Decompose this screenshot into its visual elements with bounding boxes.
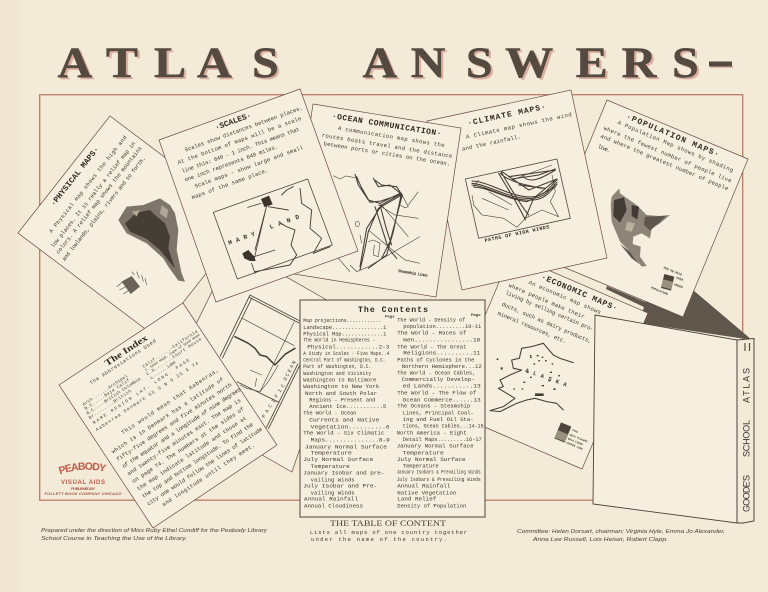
map: South America: [118, 198, 185, 282]
map caption: Steamship Lines: [398, 269, 429, 279]
heading and text: The Index: Aabenraa Denmark 55 5 N 9 25 E 74: [95, 361, 200, 433]
heading and text: The Index: The Abbreviations Used: [89, 338, 157, 386]
footer: prepared by note: [41, 528, 267, 542]
contents right column: Temperature: [403, 449, 444, 456]
map: Pacific coastline: PACIFIC: [261, 381, 288, 419]
contents right column: January Normal Surface: [397, 443, 474, 450]
contents left column: Temperature: [311, 450, 352, 457]
heading and text: Ocean Communication: A communication map shows the: [337, 125, 445, 149]
contents right column: The World - Ocean Cables,: [397, 369, 475, 376]
heading and text: Ocean Communication: [320, 111, 456, 168]
title: ANSWERS: [365, 41, 701, 89]
footer: committee: Committee: Helen Dorsart, chairman; Virginia Hyle, Emma Jo Alexander,: [517, 529, 725, 535]
map: Maryland: [213, 179, 332, 279]
legend: economic products: COAL: [572, 429, 579, 434]
heading and text: Scales: line this: 640 - 1 inch. This means that: [181, 126, 301, 175]
logo: Peabody Visual Aids: PUBLISHED BY: [71, 486, 95, 491]
contents right column: The World - The Flow of: [397, 390, 476, 397]
heading and text: Economic Maps: mineral resources, etc.: [497, 310, 567, 345]
contents left column: Central Part of Washington, D.C.: [303, 356, 385, 363]
heading and text: Population Maps: [595, 106, 740, 202]
footer: the table of content note: under the name of the country.: [311, 537, 447, 543]
heading and text: Climate Maps: [456, 98, 575, 153]
heading and text: The Index: B.C.....British Columbia: [86, 377, 142, 416]
contents right column: Annual Rainfall: [397, 483, 451, 490]
contents right column: The World - The Great: [397, 343, 466, 350]
contents right column: population.........10-11: [403, 323, 482, 330]
contents left column: North and South Polar: [305, 390, 377, 397]
contents left column: Washington and Vicinity: [303, 370, 372, 377]
map: Pacific coastline: OCEAN: [282, 358, 298, 382]
legend: population: [650, 266, 684, 296]
heading and text: Ocean Communication: ·OCEAN COMMUNICATION·: [331, 112, 442, 139]
legend: population: PER SQ.MILE: [663, 266, 683, 277]
contents right column: ed Lands...........13: [403, 383, 481, 390]
heading and text: Scales: maps of the same place.: [191, 167, 269, 201]
contents left column: vailing Winds: [311, 489, 355, 496]
footer: committee: [517, 529, 725, 543]
heading and text: Scales: At the bottom of maps will be a scale: [177, 115, 302, 166]
map: Alaska: [490, 343, 573, 412]
contents left column: July Isobar and Pre-: [303, 483, 377, 490]
legend: population: POPULATION: [650, 286, 668, 296]
contents left column: Page: [385, 316, 395, 320]
contents right column: Commercially Develop-: [402, 376, 475, 383]
map: steamship lines: [333, 174, 420, 272]
heading and text: The Index: and twenty-five minutes east. The map is: [126, 397, 242, 477]
contents right column: Temperature: [403, 462, 439, 469]
contents right column: ing and Fuel Oil Sta-: [403, 416, 474, 423]
footer: prepared by note: School Course in Teaching the Use of the Library.: [41, 536, 187, 542]
legend: economic products: GOLD PLACERS: [569, 433, 588, 444]
contents left column: January Isobar and pre-: [303, 469, 384, 476]
map caption: PATHS OF HIGH WINDS: [484, 224, 550, 244]
contents right column: men................10: [403, 336, 481, 343]
map: Maryland: MARY: [227, 229, 260, 247]
heading and text: The Index: of the equator and a longitude of nine degrees: [121, 386, 242, 470]
legend: economic products: COPPER LODE: [566, 441, 583, 451]
heading and text: Scales: Scale maps - show large and small: [194, 144, 305, 190]
contents left column: Physical............2-3: [307, 344, 389, 351]
footer: the table of content note: [310, 519, 467, 543]
heading and text: Economic Maps: living by selling certain pro-: [504, 289, 595, 333]
spine title: Goode's: GOODE'S: [742, 475, 752, 512]
contents left column: July Normal Surface: [303, 456, 373, 463]
title: ATLAS: [57, 38, 279, 86]
heading and text: Physical Maps: low places. It is really a relief map in: [49, 140, 137, 249]
card: Population Maps: [542, 100, 748, 317]
heading and text: The Index: Calif.......California: [142, 329, 199, 370]
heading and text: Scales: [170, 94, 320, 201]
heading and text: The Index: C. Good Hope..Cape of Good Hope: [144, 333, 201, 373]
heading and text: Climate Maps: A Climate map shows the wind: [465, 111, 572, 141]
heading and text: The Index: on page 74. The numbers at the sides of: [131, 406, 246, 485]
heading and text: Physical Maps: and lowlands, plains, rivers and so forth.: [61, 155, 147, 262]
contents left column: The World - Six Climatic: [303, 429, 384, 436]
card: The Index: [59, 303, 277, 528]
heading and text: Population Maps: and where the greatest number of people: [599, 133, 729, 192]
footer: the table of content note: Lists all maps of one country together: [310, 530, 467, 536]
book: Goode's School Atlas: [593, 315, 754, 523]
heading and text: The Index: city one would follow the lines of latitude: [146, 426, 264, 507]
legend: economic products: GOLD LODES: [567, 437, 584, 446]
contents left column: Ancient Ice...........5: [309, 403, 386, 410]
heading and text: Economic Maps: where people make their: [507, 282, 586, 320]
footer: the table of content note: THE TABLE OF CONTENT: [330, 519, 446, 528]
contents left column: Part of Washington, D.C.: [303, 363, 371, 370]
contents left column: Washington to New York: [303, 383, 380, 390]
heading and text: The Index: and longitude until they meet.: [161, 442, 256, 508]
logo: Peabody Visual Aids: FOLLETT BOOK COMPANY CHICAGO: [44, 491, 122, 496]
legend: population: UNDER: [674, 283, 683, 289]
heading and text: The Index: Br........British: [88, 389, 133, 421]
contents right column: The Oceans - Steamship: [397, 403, 470, 410]
logo: Peabody Visual Aids: VISUAL AIDS: [61, 480, 105, 486]
contents left column: The World in Hemispheres -: [303, 337, 375, 344]
legend: elevation shading: [117, 272, 147, 294]
logo: Peabody Visual Aids: [44, 462, 122, 496]
heading and text: Climate Maps: and the rainfall.: [461, 133, 522, 153]
heading and text: Economic Maps: An economic map shows: [528, 279, 602, 316]
contents left column: The World - Ocean: [303, 410, 356, 417]
heading and text: Physical Maps: ·PHYSICAL MAPS·: [49, 146, 102, 208]
card: Physical Maps: [18, 116, 248, 337]
heading and text: The Index: B.C.....Baja Calif.: [84, 377, 133, 412]
contents left column: Landscape................1: [303, 324, 387, 331]
heading and text: The Index: fifty-five degrees and five minutes north: [115, 381, 233, 463]
heading and text: Ocean Communication: between ports or cities on the ocean.: [323, 140, 451, 168]
footer: committee: Anna Lee Russell, Lois Heiser, Robert Clapp.: [532, 537, 668, 543]
heading and text: Economic Maps: ·ECONOMIC MAPS·: [540, 273, 619, 313]
footer: prepared by note: Prepared under the direction of Miss Ruby Ethel Cundiff for the Peabody Library: [41, 528, 267, 534]
legend: economic products: [554, 422, 588, 451]
contents right column: [397, 314, 484, 509]
heading and text: The Index: [66, 305, 272, 516]
spine marks: [745, 343, 750, 351]
contents right column: Native Vegetation: [397, 489, 456, 496]
contents right column: Land Relief: [397, 496, 436, 503]
contents right column: North America - Eight: [397, 429, 467, 436]
card: Ocean Communication: [288, 104, 461, 297]
contents left column: Annual Cloudiness: [304, 503, 363, 510]
heading and text: Scales: one inch represents 640 miles.: [184, 143, 279, 183]
heading and text: The Index: the top and bottom longitude. To find the: [141, 421, 255, 500]
contents right column: Northern Hemisphere...12: [402, 363, 482, 370]
spine title: School: SCHOOL: [742, 420, 752, 457]
map: Alaska: ALASKA: [524, 367, 572, 390]
title: ATLAS: [60, 41, 281, 89]
contents right column: tions, Ocean Cables...14-15: [403, 423, 484, 430]
title: [57, 38, 733, 89]
contents left column: Temperature: [311, 463, 350, 470]
heading and text: Physical Maps: A Physical map shows the high and: [48, 134, 129, 234]
card: Economic Maps: [445, 254, 648, 469]
contents left column: Maps...............8-9: [311, 437, 390, 444]
map: North America population: [611, 188, 670, 267]
contents right column: Page: [471, 314, 481, 318]
contents left column: Physical Map.............1: [303, 330, 387, 337]
contents right column: Detail Maps.........16-17: [403, 436, 482, 443]
logo: Peabody Visual Aids: PEABODY: [58, 462, 106, 474]
contents left column: Annual Rainfall: [304, 496, 359, 503]
contents left column: [303, 316, 395, 510]
heading and text: Economic Maps: [496, 263, 619, 358]
contents right column: July Normal Surface: [397, 456, 466, 463]
contents left column: Vegetation..........6: [311, 423, 390, 430]
contents left column: Map projections............: [303, 317, 381, 324]
red frame: [40, 95, 743, 500]
map: Maryland: LAND: [269, 212, 305, 231]
icon: dark pages wedge of the atlas: [640, 290, 752, 340]
contents right column: Religions..........11: [403, 350, 481, 357]
heading and text: The Index: The Index: [103, 332, 150, 368]
heading and text: Scales: ·SCALES·: [214, 111, 253, 133]
heading and text: Physical Maps: [27, 124, 151, 262]
heading and text: The Index: This would mean that Aabenraa,: [120, 367, 220, 436]
title: ANSWERS: [363, 38, 699, 86]
contents right column: Density of Population: [397, 502, 466, 509]
contents right column: The World - Races of: [397, 330, 466, 337]
map: Pacific coastline: [220, 295, 300, 429]
spine title: Atlas: ATLAS: [742, 368, 752, 403]
panel: The Contents: [300, 300, 485, 517]
contents right column: Lines, Principal Coal-: [403, 410, 474, 417]
heading and text: The Index: NAME REGION LAT. LONG. PAGE: [92, 358, 191, 426]
heading and text: Scales: Scales show distances between places.: [184, 104, 304, 154]
heading and text: The Index: which is in Denmark has a latitude of: [110, 376, 225, 455]
heading and text: Population Maps: where the fewest number of people live: [603, 125, 733, 184]
heading and text: Economic Maps: ducts, such as dairy products,: [501, 301, 593, 345]
heading and text: Population Maps: ·POPULATION MAPS·: [625, 113, 720, 159]
heading and text: The Index: Arch.......Archipel: [82, 374, 129, 408]
heading and text: Population Maps: A Population Map shows by shading: [616, 119, 734, 174]
card: Climate Maps: [427, 90, 607, 290]
contents right column: January Isobars & Prevailing Winds: [397, 469, 481, 476]
contents left column: Regions - Present and: [309, 396, 375, 403]
icon: page edges sliver: [606, 286, 650, 309]
contents left column: Washington to Baltimore: [303, 376, 376, 383]
heading and text: Population Maps: live.: [597, 143, 611, 154]
heading and text: The Index: C.H.......Court House: [146, 337, 203, 377]
card: Pacific map: [160, 247, 346, 472]
heading and text: Physical Maps: colors. A relief map shows the mountains: [55, 145, 144, 255]
contents right column: Paths of Cyclones in the: [397, 356, 474, 363]
heading and text: Climate Maps: ·CLIMATE MAPS·: [467, 103, 547, 128]
heading and text: The Index: L........Lake: [149, 360, 178, 381]
card: Scales: [159, 89, 358, 302]
contents right column: July Isobars & Prevailing Winds: [397, 476, 481, 483]
legend: population: OVER: [676, 276, 684, 282]
contents left column: January Normal Surface: [305, 443, 387, 450]
heading and text: Ocean Communication: routes boats travel and the distance: [321, 132, 453, 160]
map: paths of high winds: [465, 159, 570, 238]
contents right column: The World - Density of: [397, 316, 465, 323]
book spine: [737, 338, 754, 523]
contents left column: Currents and Native: [309, 416, 379, 423]
heading and text: The Index: the map indicate latitude and those at: [136, 415, 248, 492]
contents left column: vailing Winds: [311, 476, 355, 483]
contents right column: Ocean Commerce......13: [403, 396, 481, 403]
contents left column: A Study in Scales - Five Maps..4: [303, 350, 390, 357]
heading: The Contents: The Contents: [358, 305, 428, 315]
